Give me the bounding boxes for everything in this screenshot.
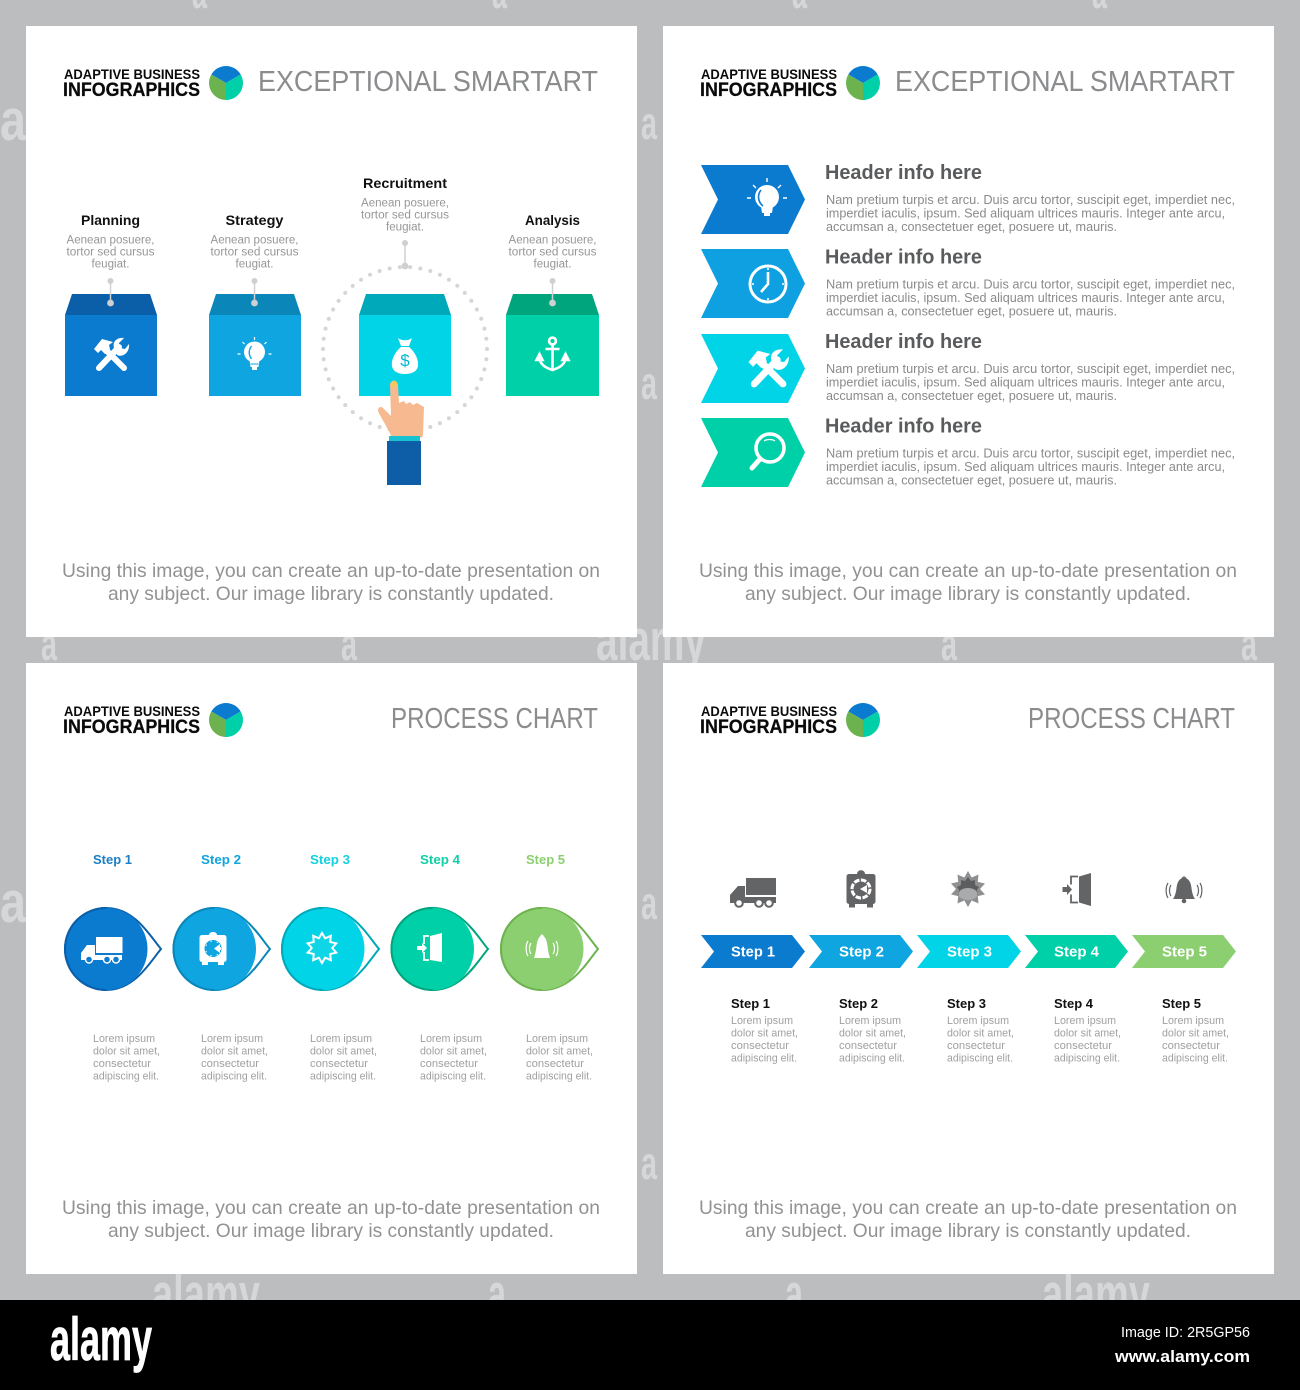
row 1: Header info here — [825, 162, 982, 184]
row 1: imperdiet iaculis, ipsum. Sed aliquam ultrices mauris. Integer ante arcu, — [826, 206, 1225, 220]
step 5: consectetur — [1162, 1040, 1220, 1052]
step 5: adipiscing elit. — [1162, 1052, 1228, 1064]
step 5: adipiscing elit. — [526, 1070, 592, 1082]
row 2: Nam pretium turpis et arcu. Duis arcu tortor, suscipit eget, imperdiet nec, — [826, 278, 1235, 292]
step 1 — [65, 852, 161, 1082]
icon: truck — [730, 878, 776, 907]
icon: anchor — [536, 338, 568, 370]
step 1: consectetur — [93, 1058, 151, 1070]
box: analysis: feugiat. — [534, 258, 572, 270]
text: a — [641, 1137, 657, 1189]
icon: safe — [846, 870, 876, 908]
step 3: Lorem ipsum — [947, 1015, 1009, 1027]
text: alamy — [152, 1262, 260, 1327]
step 1: adipiscing elit. — [93, 1070, 159, 1082]
stock photo footer bar: alamy — [50, 1306, 152, 1373]
footer text: Using this image, you can create an up-to-date presentation on — [62, 560, 600, 582]
box: analysis: Analysis — [525, 212, 580, 228]
step 1: Lorem ipsum — [731, 1015, 793, 1027]
step 4: Lorem ipsum — [1054, 1015, 1116, 1027]
step 5: consectetur — [526, 1058, 584, 1070]
header logo — [63, 66, 243, 101]
step 2: consectetur — [839, 1040, 897, 1052]
box: analysis: tortor sed cursus — [508, 246, 597, 258]
row 1: Nam pretium turpis et arcu. Duis arcu tortor, suscipit eget, imperdiet nec, — [826, 193, 1235, 207]
box: strategy: Aenean posuere, — [210, 234, 298, 246]
icon: door — [1062, 873, 1091, 906]
step 4: consectetur — [1054, 1040, 1112, 1052]
row 1 — [701, 162, 1235, 234]
row 2 — [701, 246, 1235, 318]
step 4: Step 4 — [1054, 996, 1094, 1011]
header logo: ADAPTIVE BUSINESS — [64, 66, 200, 82]
header logo — [63, 703, 243, 738]
row 2: imperdiet iaculis, ipsum. Sed aliquam ultrices mauris. Integer ante arcu, — [826, 291, 1225, 305]
box: recruitment — [359, 175, 451, 485]
text: a — [41, 618, 57, 670]
step 4: dolor sit amet, — [420, 1046, 487, 1058]
row 4: Header info here — [825, 416, 982, 438]
step 2 — [173, 852, 270, 1082]
icon: money bag: $ — [400, 351, 410, 370]
text: a — [641, 97, 657, 149]
icon: safe — [200, 932, 226, 965]
box: strategy: tortor sed cursus — [210, 246, 299, 258]
box: planning: feugiat. — [92, 258, 130, 270]
step 2 — [809, 870, 913, 1064]
panel: process chart arrows — [663, 663, 1274, 1274]
row 3 — [701, 331, 1235, 403]
step 3: dolor sit amet, — [310, 1046, 377, 1058]
row 4: accumsan a, consectetuer eget, posuere ut, mauris. — [826, 474, 1117, 488]
step 1: dolor sit amet, — [731, 1028, 798, 1040]
header logo: ADAPTIVE BUSINESS — [64, 703, 200, 719]
step 2: Step 2 — [839, 944, 884, 960]
step 5: Step 5 — [1162, 996, 1201, 1011]
box: strategy — [209, 212, 301, 396]
icon: light bulb — [238, 337, 272, 370]
box: analysis — [506, 212, 599, 396]
row 4: Nam pretium turpis et arcu. Duis arcu tortor, suscipit eget, imperdiet nec, — [826, 446, 1235, 460]
icon: bell — [1166, 876, 1202, 903]
step 5: Lorem ipsum — [1162, 1015, 1224, 1027]
footer text — [699, 1197, 1237, 1242]
icon: truck — [81, 937, 122, 963]
stock photo footer bar: www.alamy.com — [1114, 1347, 1250, 1366]
box: planning: Planning — [81, 212, 140, 228]
panel: header info arrows — [663, 26, 1274, 637]
step 2: adipiscing elit. — [839, 1052, 905, 1064]
title: EXCEPTIONAL SMARTART — [258, 66, 598, 98]
title: PROCESS CHART — [1028, 703, 1235, 735]
panel: process chart teardrops — [26, 663, 637, 1274]
box: recruitment: Recruitment — [363, 175, 447, 191]
step 1: dolor sit amet, — [93, 1046, 160, 1058]
header logo: INFOGRAPHICS — [700, 717, 837, 738]
row 1: accumsan a, consectetuer eget, posuere ut, mauris. — [826, 220, 1117, 234]
icon: tools — [748, 349, 789, 384]
icon: door — [417, 933, 442, 962]
header logo: ADAPTIVE BUSINESS — [701, 703, 837, 719]
text: alamy — [1042, 1262, 1150, 1327]
step 4 — [1025, 873, 1128, 1064]
step 5: dolor sit amet, — [1162, 1028, 1229, 1040]
box: analysis: Aenean posuere, — [508, 234, 596, 246]
row 4 — [701, 416, 1235, 488]
step 1: Step 1 — [93, 852, 132, 867]
step 5: dolor sit amet, — [526, 1046, 593, 1058]
title: EXCEPTIONAL SMARTART — [895, 66, 1235, 98]
step 3: Step 3 — [947, 944, 992, 960]
header logo — [700, 66, 880, 101]
title: PROCESS CHART — [391, 703, 598, 735]
stock photo footer bar — [0, 1300, 1300, 1390]
step 3: dolor sit amet, — [947, 1028, 1014, 1040]
header logo: INFOGRAPHICS — [63, 80, 200, 101]
footer text: Using this image, you can create an up-to-date presentation on — [62, 1197, 600, 1219]
footer text: any subject. Our image library is constantly updated. — [108, 1220, 554, 1242]
stock photo footer bar: Image ID: 2R5GP56 — [1121, 1324, 1250, 1341]
header logo — [700, 703, 880, 738]
row 2: accumsan a, consectetuer eget, posuere ut, mauris. — [826, 304, 1117, 318]
text: a — [341, 618, 357, 670]
icon: star badge — [951, 871, 985, 907]
step 4: adipiscing elit. — [420, 1070, 486, 1082]
step 1 — [701, 878, 805, 1064]
footer text: Using this image, you can create an up-to-date presentation on — [699, 1197, 1237, 1219]
box: recruitment: Aenean posuere, — [361, 198, 449, 210]
header logo: INFOGRAPHICS — [700, 80, 837, 101]
row 3: imperdiet iaculis, ipsum. Sed aliquam ultrices mauris. Integer ante arcu, — [826, 376, 1225, 390]
text: a — [1241, 618, 1257, 670]
icon: magnifier — [752, 434, 784, 468]
text: a — [941, 618, 957, 670]
step 2: dolor sit amet, — [201, 1046, 268, 1058]
row 3: accumsan a, consectetuer eget, posuere ut, mauris. — [826, 389, 1117, 403]
icon: money bag — [392, 338, 418, 374]
step 3: adipiscing elit. — [310, 1070, 376, 1082]
step 3: Step 3 — [947, 996, 986, 1011]
panel: exceptional smartart boxes — [26, 26, 637, 637]
header logo: ADAPTIVE BUSINESS — [701, 66, 837, 82]
step 3: adipiscing elit. — [947, 1052, 1013, 1064]
step 5: Step 5 — [526, 852, 565, 867]
step 1: Lorem ipsum — [93, 1033, 155, 1045]
footer text — [62, 1197, 600, 1242]
header logo: INFOGRAPHICS — [63, 717, 200, 738]
step 4: Step 4 — [420, 852, 461, 867]
step 4: Lorem ipsum — [420, 1033, 482, 1045]
footer text — [699, 560, 1237, 605]
step 1: Step 1 — [731, 996, 770, 1011]
box: strategy: feugiat. — [236, 258, 274, 270]
row 4: imperdiet iaculis, ipsum. Sed aliquam ultrices mauris. Integer ante arcu, — [826, 460, 1225, 474]
step 2: adipiscing elit. — [201, 1070, 267, 1082]
text: a — [785, 1262, 803, 1327]
step 2: Lorem ipsum — [839, 1015, 901, 1027]
text: alamy — [596, 608, 706, 673]
box: planning — [65, 212, 157, 396]
row 2: Header info here — [825, 246, 982, 268]
step 1: adipiscing elit. — [731, 1052, 797, 1064]
step 2: Step 2 — [201, 852, 241, 867]
step 5 — [501, 852, 598, 1082]
box: strategy: Strategy — [226, 212, 284, 228]
footer text: any subject. Our image library is constantly updated. — [108, 583, 554, 605]
icon: clock — [750, 266, 786, 302]
footer text — [62, 560, 600, 605]
footer text: any subject. Our image library is constantly updated. — [745, 583, 1191, 605]
row 3: Nam pretium turpis et arcu. Duis arcu tortor, suscipit eget, imperdiet nec, — [826, 362, 1235, 376]
step 1: Step 1 — [731, 944, 775, 960]
step 4 — [392, 852, 488, 1082]
text: a — [0, 88, 27, 153]
row 3: Header info here — [825, 331, 982, 353]
icon: tools — [94, 338, 129, 368]
icon: star badge — [306, 931, 338, 965]
step 5 — [1132, 876, 1236, 1064]
text: a — [0, 870, 27, 935]
step 2: dolor sit amet, — [839, 1028, 906, 1040]
step 5: Step 5 — [1162, 944, 1207, 960]
step 2: Step 2 — [839, 996, 878, 1011]
icon: pointing hand — [378, 381, 424, 485]
icon: bell — [526, 934, 558, 958]
step 3 — [917, 871, 1021, 1064]
step 3: consectetur — [310, 1058, 368, 1070]
text: a — [641, 877, 657, 929]
box: recruitment: feugiat. — [386, 222, 424, 234]
text: a — [641, 357, 657, 409]
box: recruitment: tortor sed cursus — [361, 210, 449, 222]
footer text: Using this image, you can create an up-to-date presentation on — [699, 560, 1237, 582]
step 4: Step 4 — [1054, 944, 1100, 960]
step 5: Lorem ipsum — [526, 1033, 588, 1045]
step 2: consectetur — [201, 1058, 259, 1070]
step 4: adipiscing elit. — [1054, 1052, 1120, 1064]
box: planning: tortor sed cursus — [66, 246, 155, 258]
step 2: Lorem ipsum — [201, 1033, 263, 1045]
step 3 — [282, 852, 379, 1082]
step 4: consectetur — [420, 1058, 478, 1070]
step 3: consectetur — [947, 1040, 1005, 1052]
footer text: any subject. Our image library is constantly updated. — [745, 1220, 1191, 1242]
box: planning: Aenean posuere, — [66, 234, 154, 246]
text: a — [488, 1262, 506, 1327]
dotted circle — [323, 267, 487, 431]
step 1: consectetur — [731, 1040, 789, 1052]
step 3: Step 3 — [310, 852, 350, 867]
step 4: dolor sit amet, — [1054, 1028, 1121, 1040]
icon: light bulb — [747, 178, 787, 216]
step 3: Lorem ipsum — [310, 1033, 372, 1045]
